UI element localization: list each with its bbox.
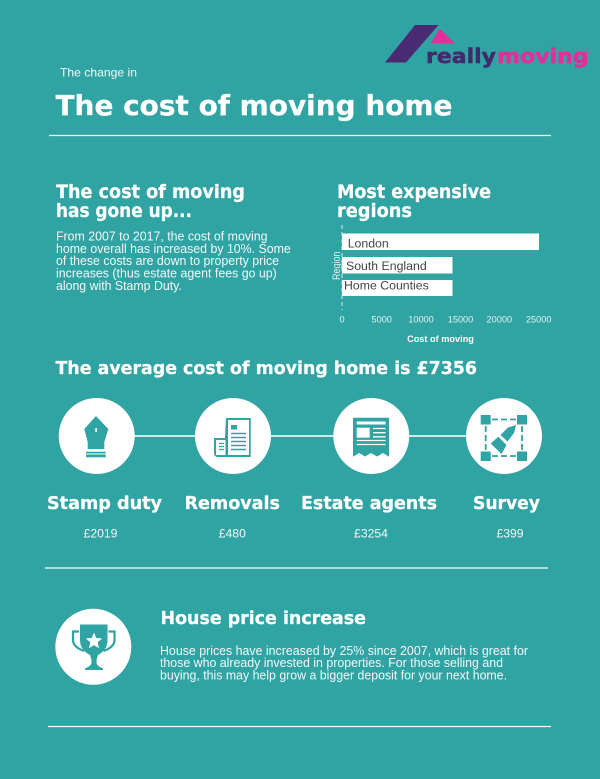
- bar: London: [342, 234, 539, 250]
- text block: cost increase: increases (thus estate agent fees go up): [56, 266, 277, 280]
- icon: survey brush in selection frame: [466, 398, 542, 474]
- title: The cost of moving home: [56, 89, 452, 122]
- text block: house prices: [160, 644, 528, 682]
- bar: Home Counties: [342, 278, 452, 296]
- icon: trophy: [55, 609, 131, 685]
- logo: reallymoving: moving: [497, 44, 588, 68]
- label: Removals: Removals: [184, 493, 280, 514]
- value: removals: £480: [219, 527, 246, 541]
- text block: cost increase: From 2007 to 2017, the cost of moving: [56, 230, 268, 244]
- icon: removals document: [195, 398, 271, 474]
- axis ticks: 15000: [448, 314, 473, 324]
- icon: stamp duty pen nib: [59, 398, 135, 474]
- heading: most expensive regions: regions: [337, 200, 412, 222]
- axis ticks: 5000: [371, 314, 392, 324]
- value: estate agents: £3254: [354, 527, 388, 541]
- axis ticks: 20000: [487, 314, 512, 324]
- text block: cost increase: along with Stamp Duty.: [56, 279, 182, 293]
- label: Stamp duty: Stamp duty: [47, 493, 162, 514]
- logo: reallymoving: really: [426, 44, 496, 68]
- axis ticks: 10000: [408, 314, 434, 324]
- axis ticks: 25000: [526, 314, 551, 324]
- heading: most expensive regions: Most expensive: [337, 181, 491, 203]
- heading: house price increase: House price increase: [160, 608, 366, 629]
- heading: the cost of moving has gone up: has gone up...: [56, 200, 192, 222]
- icon: estate agents receipt: [333, 398, 409, 474]
- value: stamp duty: £2019: [84, 527, 118, 541]
- heading: most expensive regions: [337, 181, 491, 222]
- text block: house prices: those who already invested in properties. For those selling and: [160, 656, 503, 670]
- subtitle: The change in: [60, 66, 137, 80]
- bar chart: most expensive regions: [331, 225, 551, 344]
- heading: the cost of moving has gone up: The cost of moving: [56, 181, 245, 203]
- text block: house prices: House prices have increased by 25% since 2007, which is great for: [160, 644, 528, 658]
- text block: cost increase: home overall has increased by 10%. Some: [56, 242, 291, 256]
- label: Survey: Survey: [473, 493, 540, 514]
- text block: cost increase: of these costs are down to property price: [56, 254, 279, 268]
- text block: cost increase: [56, 230, 291, 293]
- axis ticks: 0: [339, 314, 345, 324]
- heading: the cost of moving has gone up: [56, 181, 245, 222]
- label: Estate agents: Estate agents: [301, 493, 437, 514]
- bar: South England: South England: [346, 259, 427, 273]
- axis ticks: [339, 314, 551, 324]
- bar: South England: [342, 257, 452, 274]
- axis label: Cost of moving: Cost of moving: [407, 334, 474, 344]
- text block: house prices: buying, this may help grow a bigger deposit for your next home.: [160, 668, 507, 682]
- bar: Home Counties: Home Counties: [344, 278, 429, 292]
- value: survey: £399: [496, 527, 524, 541]
- bar: London: London: [348, 236, 389, 250]
- heading: average cost: The average cost of moving home is £7356: [56, 358, 477, 379]
- logo: reallymoving: [385, 25, 588, 68]
- axis label: Region: Region: [331, 252, 343, 280]
